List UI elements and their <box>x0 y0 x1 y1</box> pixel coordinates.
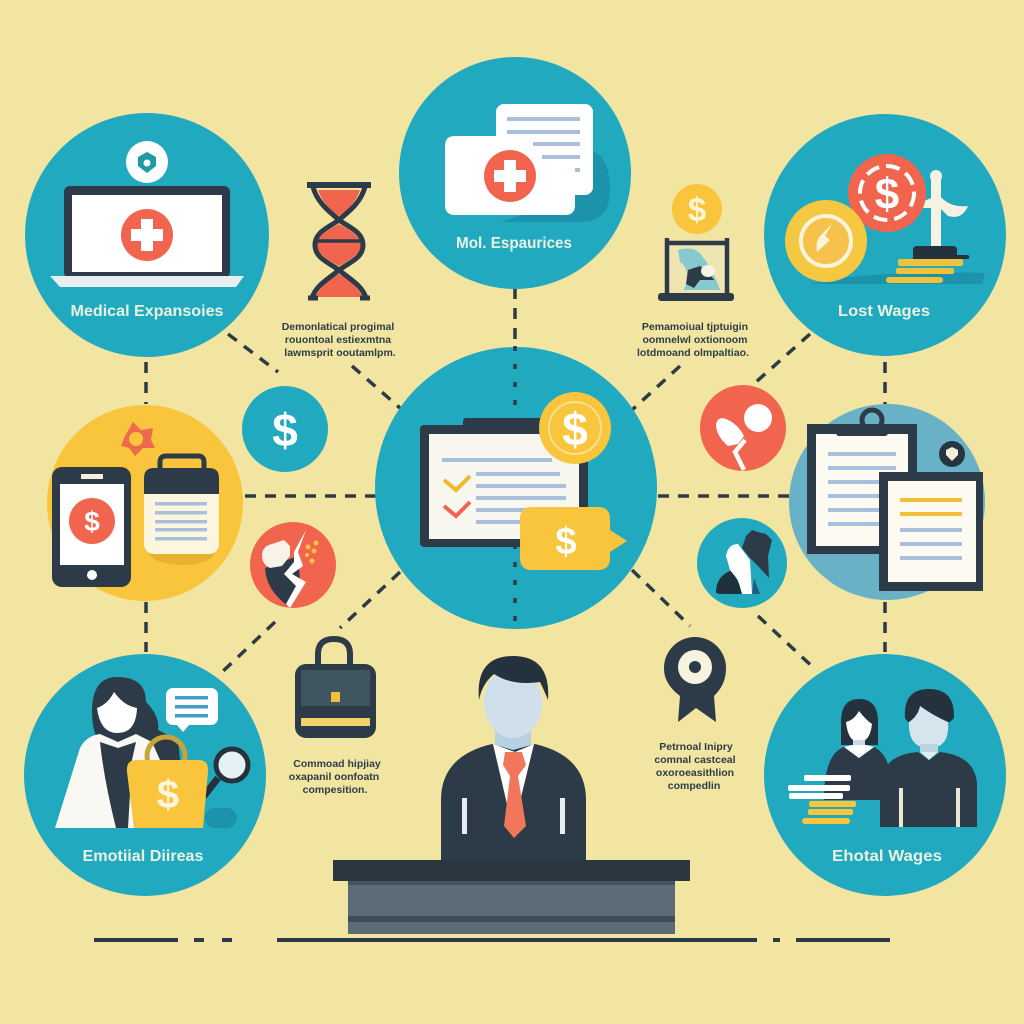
icon: stacked bills <box>788 775 880 827</box>
ground line <box>94 938 890 942</box>
icon: chat bubble <box>166 688 218 732</box>
head <box>479 656 548 754</box>
text block: lower right: oxoroeasithlion <box>656 767 734 779</box>
icon: scales <box>919 170 968 248</box>
text block: upper left: Demonlatical progimal <box>282 321 394 333</box>
icon: gold coin <box>539 392 611 464</box>
icon: briefcase lower <box>295 639 376 738</box>
panel: medical expenses top left <box>25 113 269 357</box>
icon: framed scale <box>658 238 734 301</box>
icon: laptop <box>50 186 244 287</box>
icon: red dollar coin: $ <box>875 170 899 219</box>
icon: dollar coin upper right: $ <box>688 191 706 228</box>
text block: lower left: oxapanil oonfoatn <box>289 771 379 783</box>
podium <box>333 860 690 934</box>
text block: upper right: Pemamoiual tjptuigin <box>642 321 748 333</box>
panel: right pale circle with documents <box>789 404 985 600</box>
icon: phone <box>52 467 131 587</box>
panel: emotional distress bottom left <box>24 654 266 896</box>
icon: teal person stress <box>697 518 787 608</box>
icon: red splash <box>121 422 155 456</box>
icon: dollar circle left <box>242 386 328 472</box>
panel: medical expenses top centre <box>399 57 631 289</box>
icon: hourglass helix <box>307 182 371 298</box>
icon: gold coin: $ <box>562 403 588 455</box>
figure: woman <box>55 677 180 828</box>
text block: lower left: compesition. <box>303 784 367 796</box>
icon: red broken heart <box>700 385 786 471</box>
text block: lower right: comnal castceal <box>654 754 736 766</box>
label: Ehotal Wages <box>832 848 942 865</box>
icon: speech bubble <box>520 507 627 570</box>
dashed connectors <box>146 288 885 674</box>
text block: upper left: rouontoal estiexmtna <box>285 334 391 346</box>
icon: badge <box>126 141 168 183</box>
panel: lost wages top right <box>764 114 1006 356</box>
label: Mol. Espaurices <box>456 235 572 252</box>
label: Lost Wages <box>838 303 930 320</box>
icon: dollar circle left: $ <box>272 404 298 456</box>
icon: stacked coins <box>886 246 970 283</box>
icon: dollar coin upper right <box>672 184 722 234</box>
text block: lower left <box>289 758 381 796</box>
text block: upper left: lawmsprit ooutamlpm. <box>284 347 396 359</box>
text block: lower right <box>654 741 736 792</box>
text block: lower right: compedlin <box>668 780 720 792</box>
dotted centre line <box>513 346 517 628</box>
icon: red fist <box>250 522 336 608</box>
icon: speech bubble: $ <box>555 521 577 563</box>
icon: small badge <box>939 441 965 467</box>
icon: magnifier <box>204 749 248 796</box>
label: Medical Expansoies <box>70 303 224 320</box>
figure: woman <box>824 699 893 800</box>
text block: upper right: oomnelwl oxtionoom <box>642 334 748 346</box>
icon: coin shadow <box>810 272 985 284</box>
icon: gold clock coin <box>785 200 867 282</box>
text block: upper right: lotdmoand olmpaltiao. <box>637 347 749 359</box>
icon: clipboard <box>807 410 917 554</box>
icon: clipboard <box>420 418 588 547</box>
icon: document <box>879 472 983 591</box>
text block: upper right <box>637 321 749 359</box>
icon: document <box>496 104 593 195</box>
figure: man <box>880 689 977 827</box>
icon: medical card <box>445 136 575 215</box>
icon: gold bag: $ <box>157 773 179 817</box>
text block: upper left <box>282 321 396 359</box>
figure: lawyer <box>333 656 690 934</box>
icon: gold bag <box>127 737 237 828</box>
icon: phone: $ <box>84 506 100 537</box>
panel: central clipboard <box>375 346 657 629</box>
text block: lower left: Commoad hipjiay <box>293 758 381 770</box>
text block: lower right: Petrnoal Inipry <box>659 741 733 753</box>
label: Emotiial Diireas <box>82 848 204 865</box>
icon: red dollar coin <box>848 154 926 232</box>
panel: left yellow circle <box>47 405 243 601</box>
panel: emotional wages bottom right <box>764 654 1006 896</box>
jacket <box>441 744 586 860</box>
icon: briefcase <box>144 456 219 565</box>
icon: map pin <box>664 637 726 722</box>
